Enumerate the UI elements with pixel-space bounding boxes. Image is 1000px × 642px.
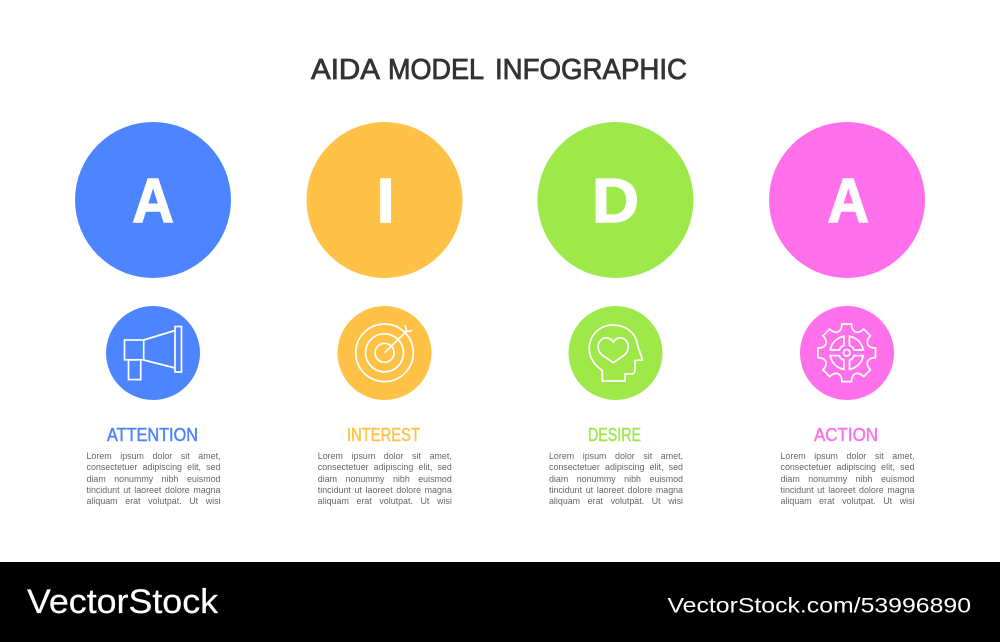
text block: attention: aliquam erat volutpat. Ut wisi <box>86 496 220 506</box>
text block: interest: aliquam erat volutpat. Ut wisi <box>318 496 452 506</box>
footer bar: VectorStock.com/53996890 <box>668 593 971 617</box>
heading: desire: DESIRE <box>588 424 641 445</box>
text block: desire: diam nonummy nibh euismod <box>549 474 683 484</box>
text block: desire: aliquam erat volutpat. Ut wisi <box>549 496 683 506</box>
text block: attention: consectetuer adipiscing elit, sed <box>86 462 220 472</box>
text block: interest: Lorem ipsum dolor sit amet, <box>318 451 452 461</box>
panel: I letter circle: I <box>377 166 394 236</box>
text block: action: tincidunt ut laoreet dolore magna <box>780 485 914 495</box>
text block: interest: tincidunt ut laoreet dolore magna <box>318 485 452 495</box>
title: MODEL <box>388 54 484 86</box>
panel: I letter circle <box>306 122 462 278</box>
panel: second A letter circle: A <box>828 166 869 236</box>
footer bar: VectorStock <box>27 583 219 621</box>
text block: desire <box>549 451 683 506</box>
footer bar <box>0 562 1000 642</box>
text block: action: consectetuer adipiscing elit, sed <box>780 462 914 472</box>
heading: action: ACTION <box>814 424 878 445</box>
text block: interest <box>318 451 452 506</box>
text block: attention: tincidunt ut laoreet dolore magna <box>86 485 220 495</box>
text block: attention: Lorem ipsum dolor sit amet, <box>86 451 220 461</box>
panel: A letter circle: A <box>132 166 174 236</box>
panel: A letter circle <box>75 122 231 278</box>
text block: desire: consectetuer adipiscing elit, sed <box>549 462 683 472</box>
icon: target with arrow <box>338 306 432 400</box>
text block: desire: Lorem ipsum dolor sit amet, <box>549 451 683 461</box>
panel: second A letter circle <box>769 122 925 278</box>
text block: action: Lorem ipsum dolor sit amet, <box>780 451 914 461</box>
panel: D letter circle <box>538 122 694 278</box>
panel: D letter circle: D <box>592 166 639 236</box>
text block: interest: diam nonummy nibh euismod <box>318 474 452 484</box>
text block: interest: consectetuer adipiscing elit, sed <box>318 462 452 472</box>
text block: action: diam nonummy nibh euismod <box>780 474 914 484</box>
text block: desire: tincidunt ut laoreet dolore magna <box>549 485 683 495</box>
heading: interest: INTEREST <box>347 424 420 445</box>
icon: gear <box>800 306 894 400</box>
text block: action: aliquam erat volutpat. Ut wisi <box>780 496 914 506</box>
icon: megaphone <box>106 306 200 400</box>
text block: attention <box>86 451 220 506</box>
heading: attention: ATTENTION <box>107 424 198 445</box>
text block: action <box>780 451 914 506</box>
title: INFOGRAPHIC <box>495 54 687 86</box>
icon: head with heart <box>568 306 662 400</box>
title <box>311 54 687 86</box>
text block: attention: diam nonummy nibh euismod <box>86 474 220 484</box>
title: AIDA <box>311 54 380 86</box>
